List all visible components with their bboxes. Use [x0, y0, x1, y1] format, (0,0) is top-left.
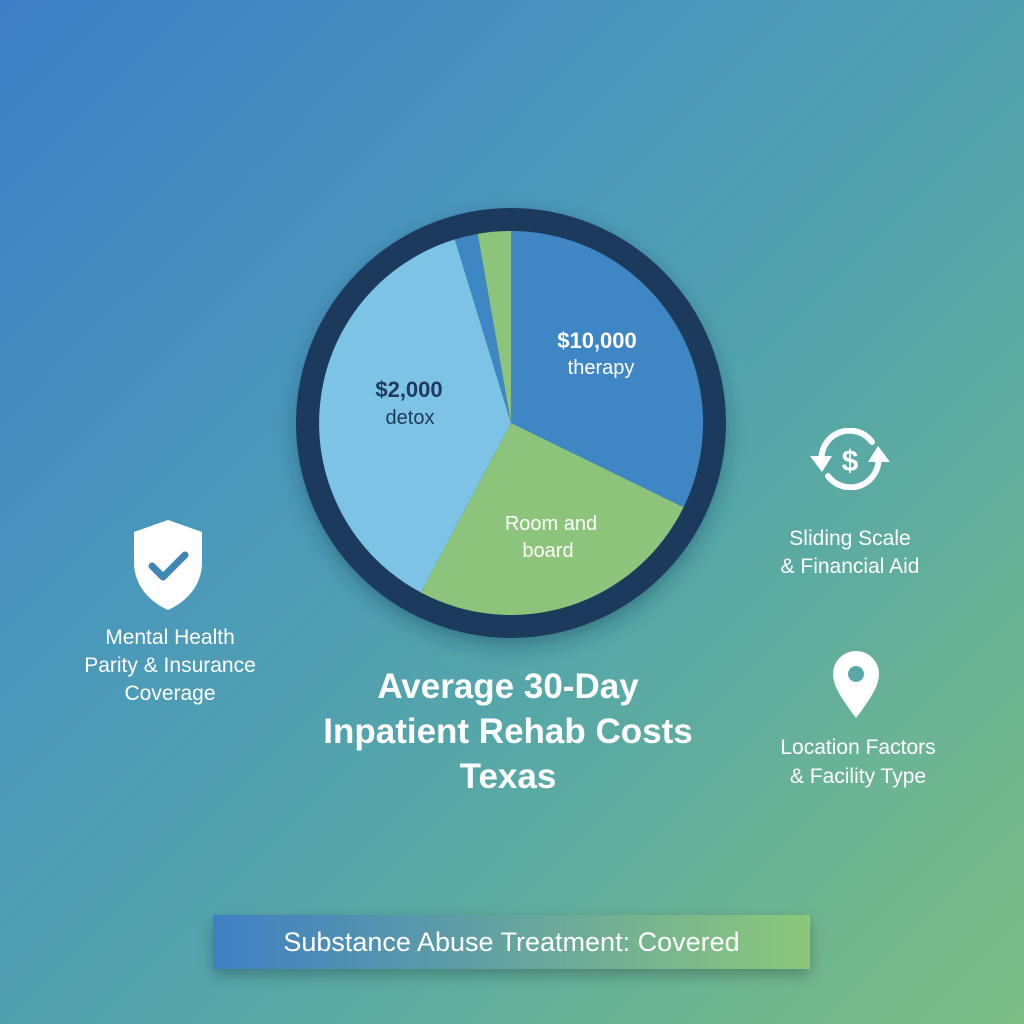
text: sliding scale: & Financial Aid: [781, 555, 919, 578]
pie chart: detox: [386, 407, 434, 429]
banner: [213, 915, 810, 969]
pie chart: Room and: [505, 513, 597, 535]
text: sliding scale: Sliding Scale: [789, 527, 911, 550]
text: mental health: Mental Health: [105, 626, 235, 649]
text: sliding scale: [781, 527, 919, 578]
title: [323, 667, 693, 796]
text: mental health: [84, 626, 256, 705]
pie chart: therapy: [568, 357, 634, 379]
icon: location pin: [833, 651, 879, 718]
text: mental health: Coverage: [124, 682, 216, 705]
icon: shield: [134, 520, 202, 610]
icon: dollar cycle: $: [842, 445, 859, 478]
text: location: [780, 736, 936, 788]
text: mental health: Parity & Insurance: [84, 654, 256, 677]
banner: Substance Abuse Treatment: Covered: [283, 927, 740, 957]
title: Texas: [460, 757, 556, 796]
pie chart: board: [522, 540, 574, 562]
pie chart: $10,000: [557, 328, 637, 353]
text: location: Location Factors: [780, 736, 936, 759]
title: Average 30-Day: [377, 667, 639, 706]
pie chart: $2,000: [375, 377, 443, 402]
icon: dollar cycle: [810, 428, 890, 490]
title: Inpatient Rehab Costs: [323, 712, 693, 751]
text: location: & Facility Type: [790, 765, 926, 788]
